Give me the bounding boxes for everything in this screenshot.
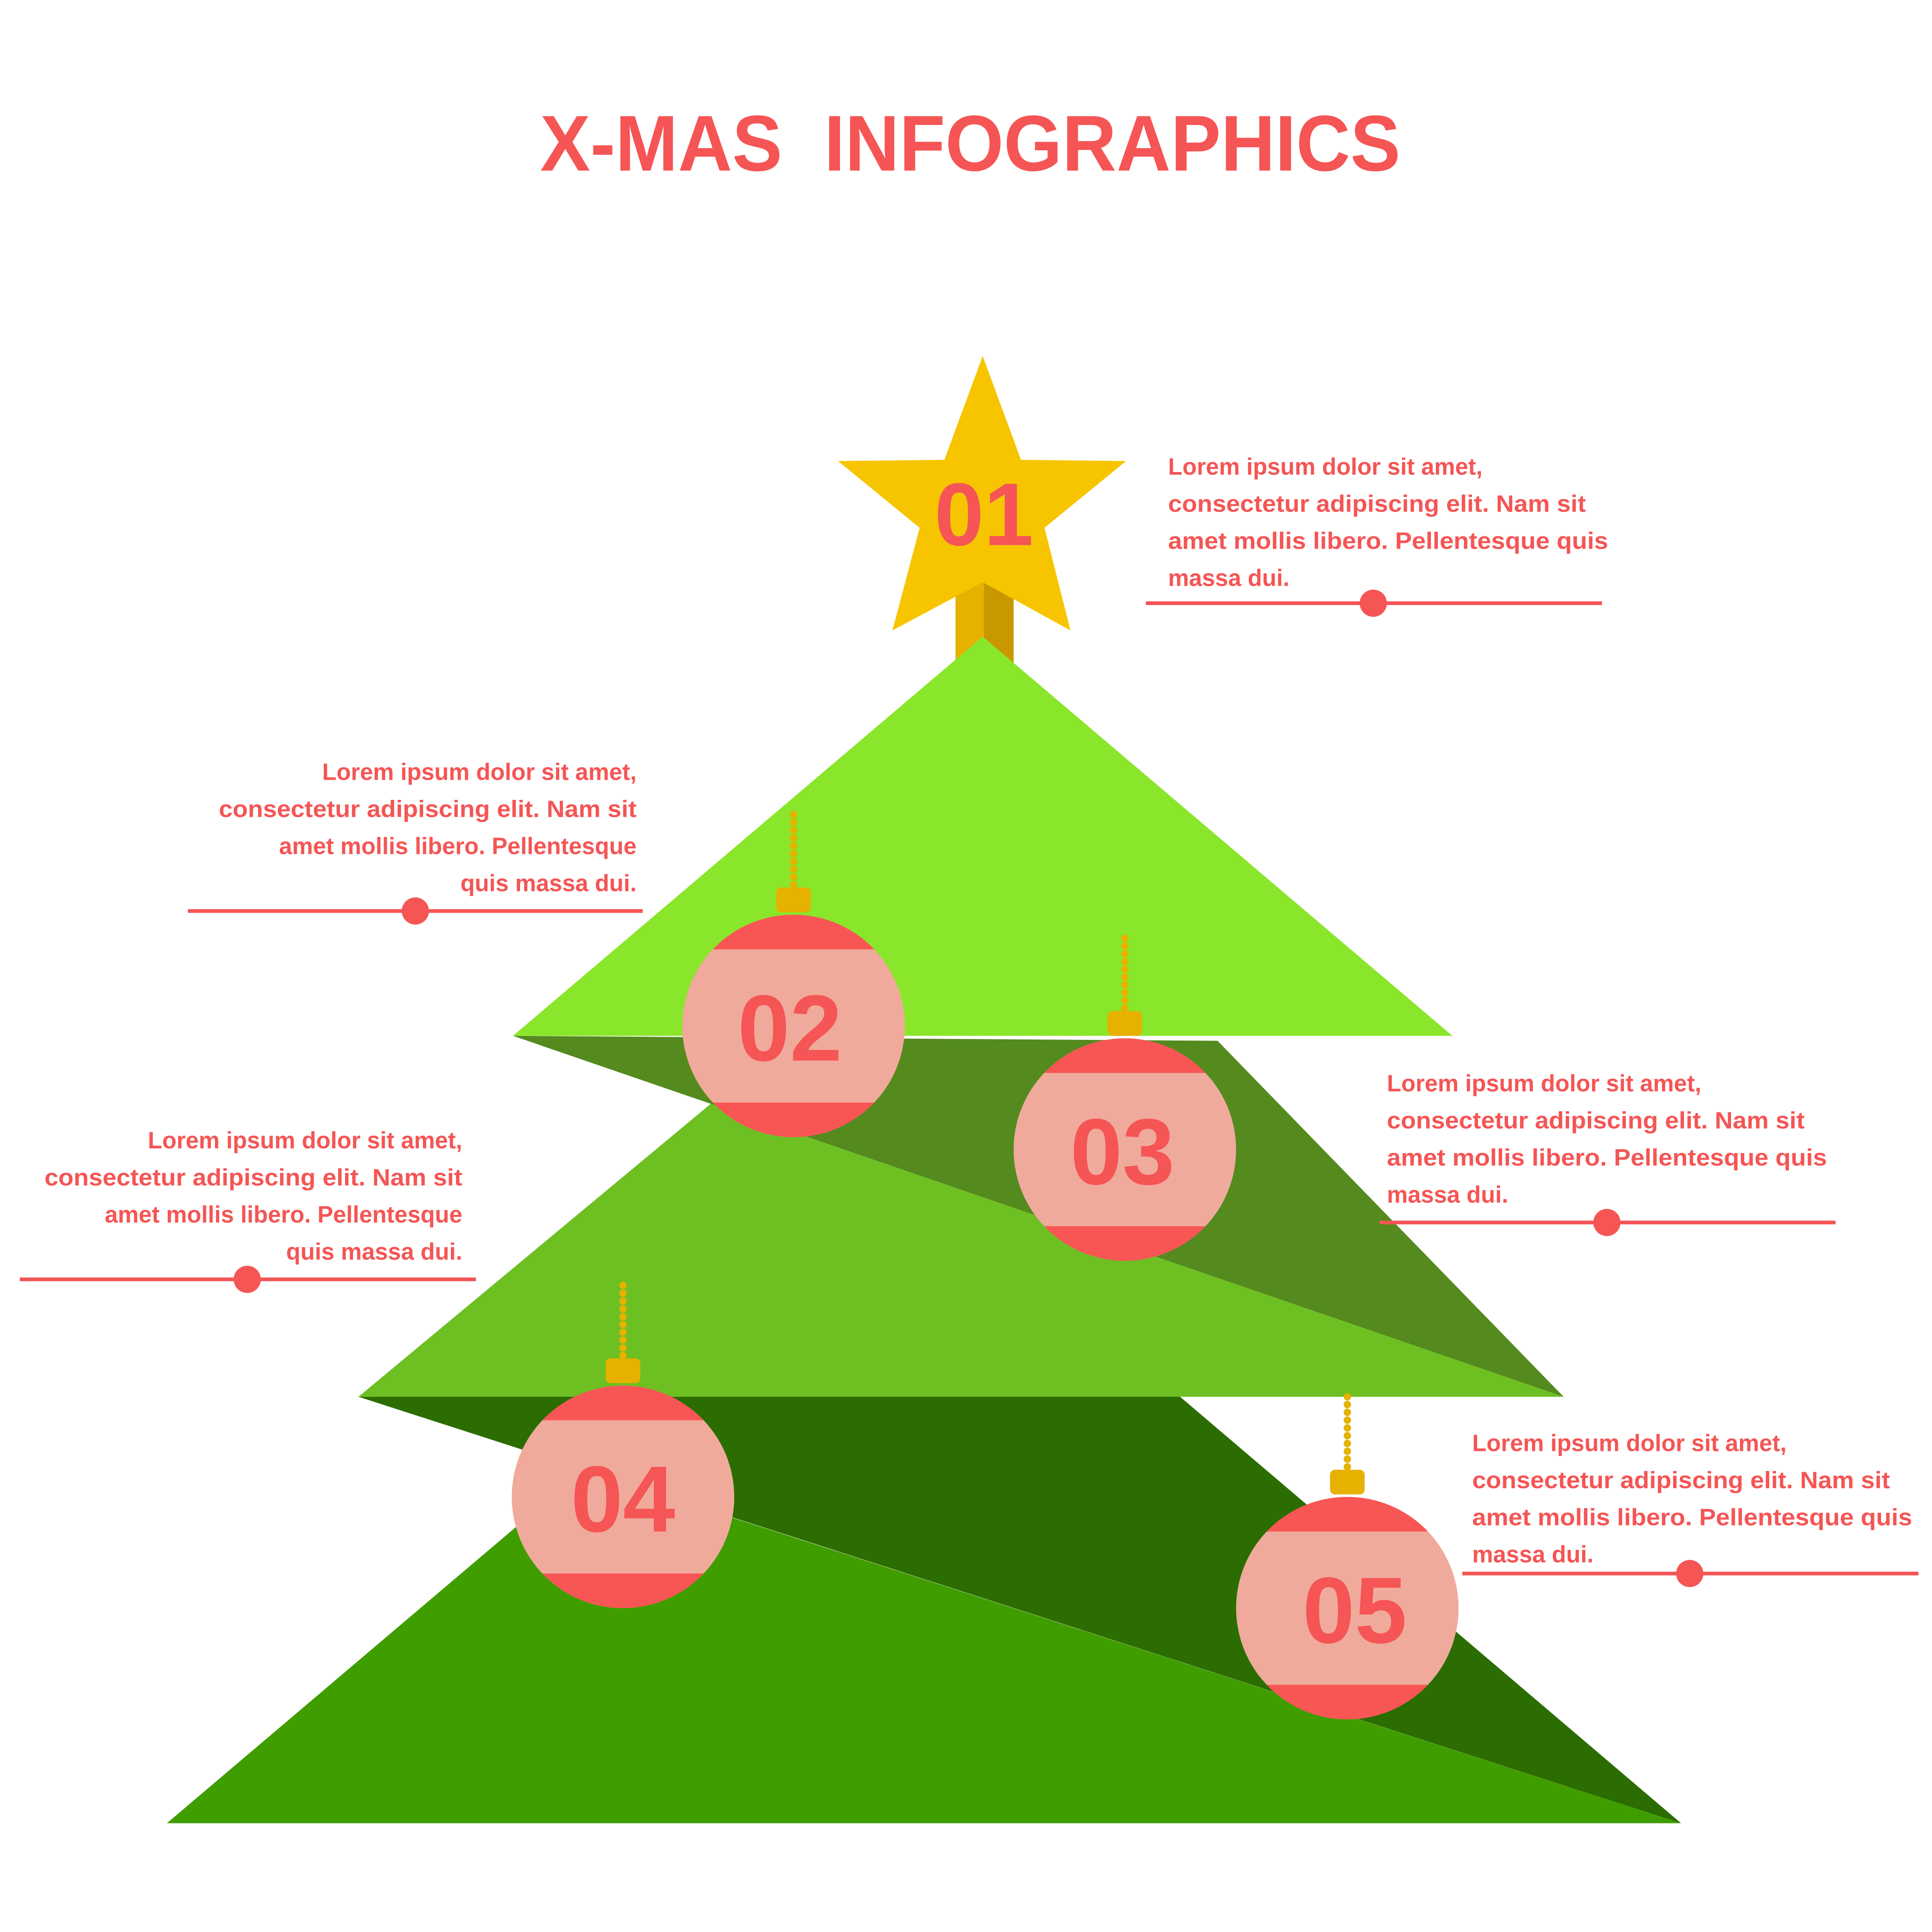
ornament 04 — [512, 1286, 734, 1608]
text block 03: Lorem ipsum dolor sit amet, — [1387, 1070, 1701, 1097]
title: X-MAS INFOGRAPHICS — [540, 99, 1400, 187]
text block 03 — [1379, 1070, 1835, 1236]
text block 02: quis massa dui. — [461, 870, 636, 896]
tree — [167, 581, 1681, 1823]
text block 02: amet mollis libero. Pellentesque — [279, 833, 636, 859]
ornament 02: 02 — [738, 976, 842, 1081]
middle dark band — [513, 1036, 1564, 1397]
ornament 05: 05 — [1303, 1558, 1407, 1663]
ornament 02 — [682, 815, 905, 1137]
text block 05: massa dui. — [1472, 1541, 1594, 1568]
ornament 03: 03 — [1070, 1099, 1175, 1204]
text block 02: Lorem ipsum dolor sit amet, — [322, 759, 636, 785]
text block 05 — [1462, 1430, 1918, 1587]
text block 04 — [20, 1127, 476, 1293]
text block 05: amet mollis libero. Pellentesque quis — [1472, 1504, 1912, 1531]
ornament 03 — [1014, 938, 1236, 1261]
text block 05: consectetur adipiscing elit. Nam sit — [1472, 1467, 1890, 1493]
text block 01: amet mollis libero. Pellentesque quis — [1168, 527, 1608, 554]
text block 04: Lorem ipsum dolor sit amet, — [148, 1127, 462, 1153]
star 01: 01 — [934, 464, 1033, 564]
text block 01: massa dui. — [1168, 565, 1289, 591]
text block 02: consectetur adipiscing elit. Nam sit — [219, 796, 636, 822]
text block 04: consectetur adipiscing elit. Nam sit — [44, 1164, 462, 1190]
text block 01: Lorem ipsum dolor sit amet, — [1168, 453, 1483, 480]
ornament 05 — [1236, 1397, 1459, 1719]
star 01 — [838, 356, 1126, 630]
text block 04: quis massa dui. — [286, 1238, 462, 1265]
star trunk — [956, 581, 1014, 667]
top tier — [513, 636, 1452, 1036]
text block 02 — [188, 759, 643, 925]
text block 01 — [1146, 453, 1608, 617]
text block 01: consectetur adipiscing elit. Nam sit — [1168, 490, 1586, 517]
middle tier — [359, 1104, 1564, 1397]
text block 03: amet mollis libero. Pellentesque quis — [1387, 1145, 1827, 1171]
lower dark band — [359, 1392, 1681, 1823]
lower tier — [167, 1470, 1681, 1823]
ornament 04: 04 — [571, 1447, 675, 1552]
text block 05: Lorem ipsum dolor sit amet, — [1472, 1430, 1787, 1456]
text block 03: massa dui. — [1387, 1182, 1508, 1208]
text block 04: amet mollis libero. Pellentesque — [105, 1201, 462, 1228]
text block 03: consectetur adipiscing elit. Nam sit — [1387, 1107, 1805, 1134]
